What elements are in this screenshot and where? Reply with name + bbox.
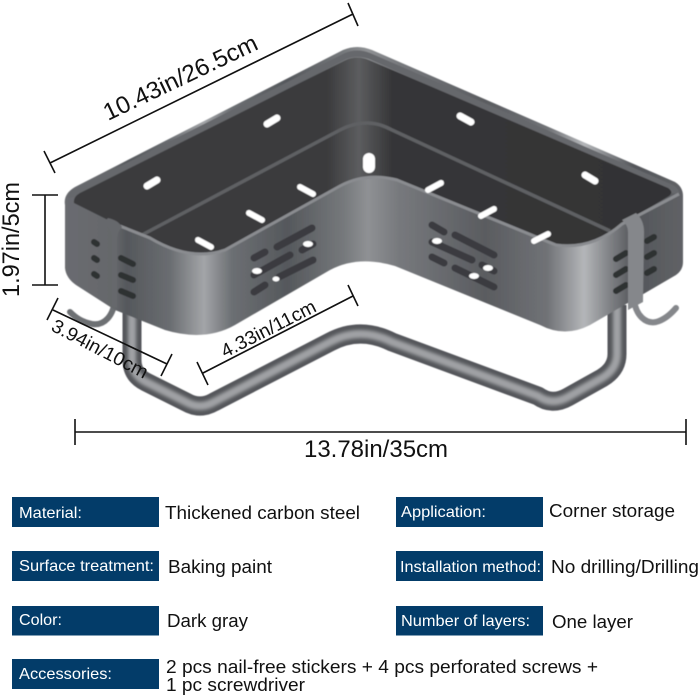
left clip strap xyxy=(105,218,122,308)
dimension: back width xyxy=(44,3,358,173)
spec: number of layers: One layer xyxy=(552,612,633,632)
spec: color: Color: xyxy=(19,612,62,629)
shelf body xyxy=(65,47,683,335)
dimension: total width: 13.78in/35cm xyxy=(304,436,448,463)
spec: material: Material: xyxy=(19,505,82,522)
spec: installation method: Installation method: xyxy=(400,559,541,576)
spec: application xyxy=(396,497,675,527)
front slots left xyxy=(254,228,313,292)
dimension: side depth xyxy=(47,298,172,383)
spec: number of layers xyxy=(396,606,633,636)
back rim xyxy=(68,50,679,198)
spec: number of layers: Number of layers: xyxy=(401,613,530,630)
left hook xyxy=(70,298,115,324)
spec: material: Thickened carbon steel xyxy=(165,503,360,523)
spec: surface treatment: Baking paint xyxy=(168,557,272,577)
spec: surface treatment xyxy=(12,551,272,581)
towel bar xyxy=(132,305,617,406)
dimension: height xyxy=(0,182,58,297)
dimension: inner length: 4.33in/11cm xyxy=(218,297,320,362)
spec: application: Corner storage xyxy=(549,501,675,521)
spec: accessories: Accessories: xyxy=(19,666,112,683)
spec: color xyxy=(12,606,248,636)
dimension: total width xyxy=(75,419,686,463)
dimension: inner length xyxy=(197,285,358,385)
spec: application: Application: xyxy=(401,504,486,521)
shelf interior xyxy=(74,58,671,254)
spec: color: Dark gray xyxy=(167,611,248,631)
spec: accessories: 1 pc screwdriver xyxy=(166,675,305,695)
dimension: side depth: 3.94in/10cm xyxy=(48,316,151,383)
spec: surface treatment: Surface treatment: xyxy=(19,558,154,575)
front slots right xyxy=(432,225,494,287)
spec: accessories: 2 pcs nail-free stickers + 4 pcs perforated screws + xyxy=(166,657,598,677)
spec: installation method xyxy=(396,551,699,581)
front rim highlight xyxy=(120,177,679,254)
inner ledge line xyxy=(140,123,610,236)
mounting holes xyxy=(147,116,595,247)
spec: accessories xyxy=(12,657,598,695)
right clip strap xyxy=(622,213,644,310)
spec: installation method: No drilling/Drilling xyxy=(551,557,699,577)
spec: material xyxy=(12,497,360,527)
dimension: back width: 10.43in/26.5cm xyxy=(99,30,262,126)
side slots xyxy=(94,237,654,296)
right hook xyxy=(634,300,676,322)
slot highlights xyxy=(252,238,493,282)
product: corner shelf xyxy=(65,47,683,406)
